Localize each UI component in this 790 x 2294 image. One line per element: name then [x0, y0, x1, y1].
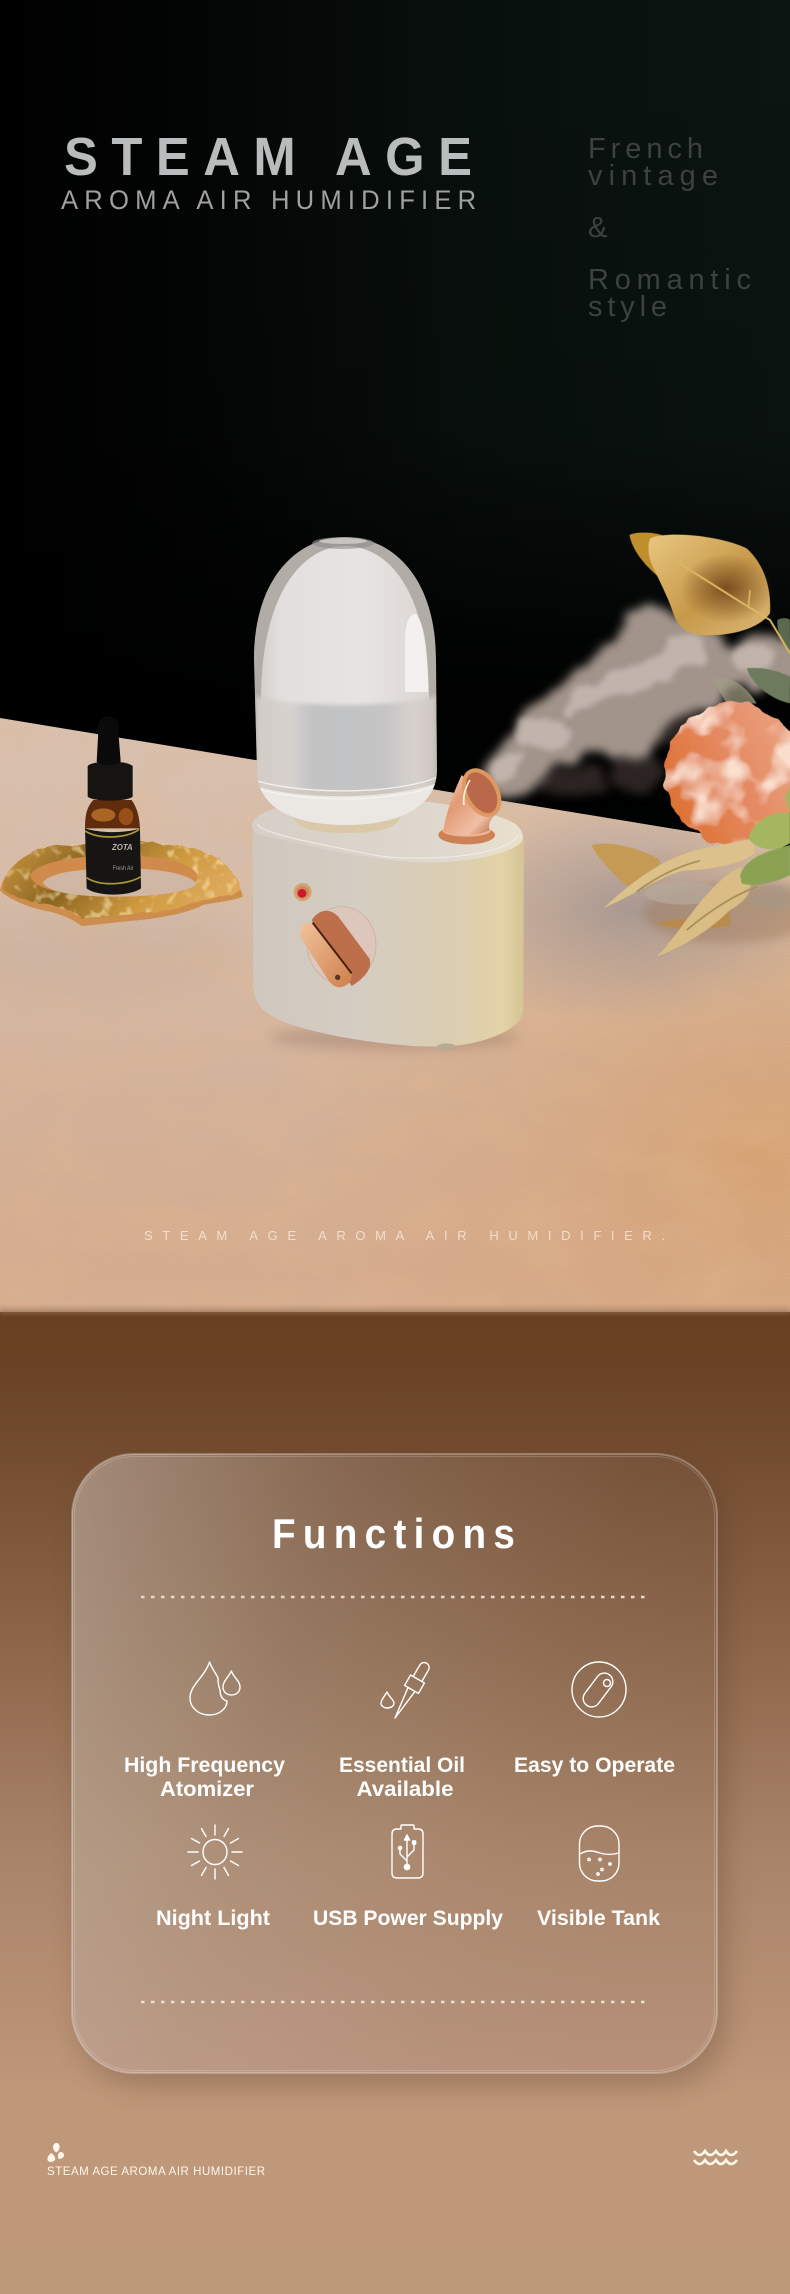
- ground shadow: [270, 1026, 520, 1050]
- brown lower background: [0, 1312, 790, 2294]
- gold leaf: [629, 532, 790, 653]
- glass capsule water tank: [254, 537, 438, 833]
- rose gold nozzle: [438, 764, 506, 844]
- label: Visible Tank: Visible Tank: [537, 1907, 660, 1930]
- peony flower: [665, 702, 790, 845]
- footer brand: [47, 2143, 265, 2178]
- icon: dropper: [381, 1659, 434, 1722]
- device base: [252, 764, 524, 1051]
- panel: functions card: [72, 1454, 725, 2085]
- dial with rose gold knob: [300, 907, 376, 987]
- label: USB Power Supply: USB Power Supply: [313, 1907, 503, 1930]
- text block: French vintage and romantic style: French: [588, 133, 703, 165]
- flowers and leaves: [592, 532, 790, 957]
- tagline on fabric: STEAM AGE AROMA AIR HUMIDIFIER.: [144, 1228, 665, 1243]
- label: High Frequency Atomizer: [124, 1754, 285, 1801]
- brown background leaf: [592, 844, 730, 929]
- label: Essential Oil Available: [339, 1754, 465, 1801]
- text block: French vintage and romantic style: Romantic: [588, 264, 751, 296]
- icon: water drops: [190, 1662, 240, 1715]
- heading: Functions: Functions: [272, 1509, 515, 1557]
- label: Easy to Operate: Easy to Operate: [514, 1754, 675, 1777]
- shadow on table under flowers: [643, 883, 790, 943]
- green leaves: [740, 787, 790, 885]
- oil bottle: Fresh Air: [113, 865, 134, 872]
- text block: French vintage and romantic style: &: [588, 212, 607, 244]
- icon: USB battery: [392, 1825, 423, 1878]
- oil bottle: [85, 717, 141, 895]
- label: Essential Oil Available: Available: [356, 1778, 454, 1801]
- lid: [252, 802, 523, 863]
- icon: three petals: [47, 2143, 64, 2162]
- oil bottle: ZOTA: [111, 843, 133, 852]
- icon: waves: [694, 2151, 737, 2164]
- text block: French vintage and romantic style: style: [588, 291, 667, 323]
- label: Night Light: Night Light: [156, 1907, 270, 1930]
- indicator light: [294, 883, 312, 901]
- heading: product title: STEAM AGE: [64, 128, 472, 187]
- text block: French vintage and romantic style: vintage: [588, 160, 718, 192]
- label: High Frequency Atomizer: Atomizer: [160, 1778, 254, 1801]
- smoke from nozzle: [483, 603, 790, 797]
- dark wall background: [0, 0, 790, 860]
- footer text: STEAM AGE AROMA AIR HUMIDIFIER: [47, 2166, 265, 2178]
- icon: knob: [572, 1662, 626, 1717]
- tabletop fabric: [0, 710, 790, 1315]
- text block: French vintage and romantic style: [588, 133, 751, 323]
- humidifier: [252, 537, 524, 1051]
- heading: product title: AROMA AIR HUMIDIFIER: [61, 184, 476, 215]
- gold tray with essential oil bottle: [0, 717, 243, 926]
- gold ornate tray: [0, 842, 243, 926]
- icon: sun: [188, 1825, 242, 1879]
- label: High Frequency Atomizer: High Frequency: [124, 1754, 285, 1777]
- icon: visible tank: [580, 1826, 619, 1881]
- label: Essential Oil Available: Essential Oil: [339, 1754, 465, 1777]
- divider: bottom dotted: [141, 2001, 648, 2003]
- divider: top dotted: [141, 1596, 648, 1598]
- heading: product title: [61, 128, 476, 215]
- soft green leaves: [713, 618, 790, 703]
- pale foreground leaves: [603, 838, 757, 957]
